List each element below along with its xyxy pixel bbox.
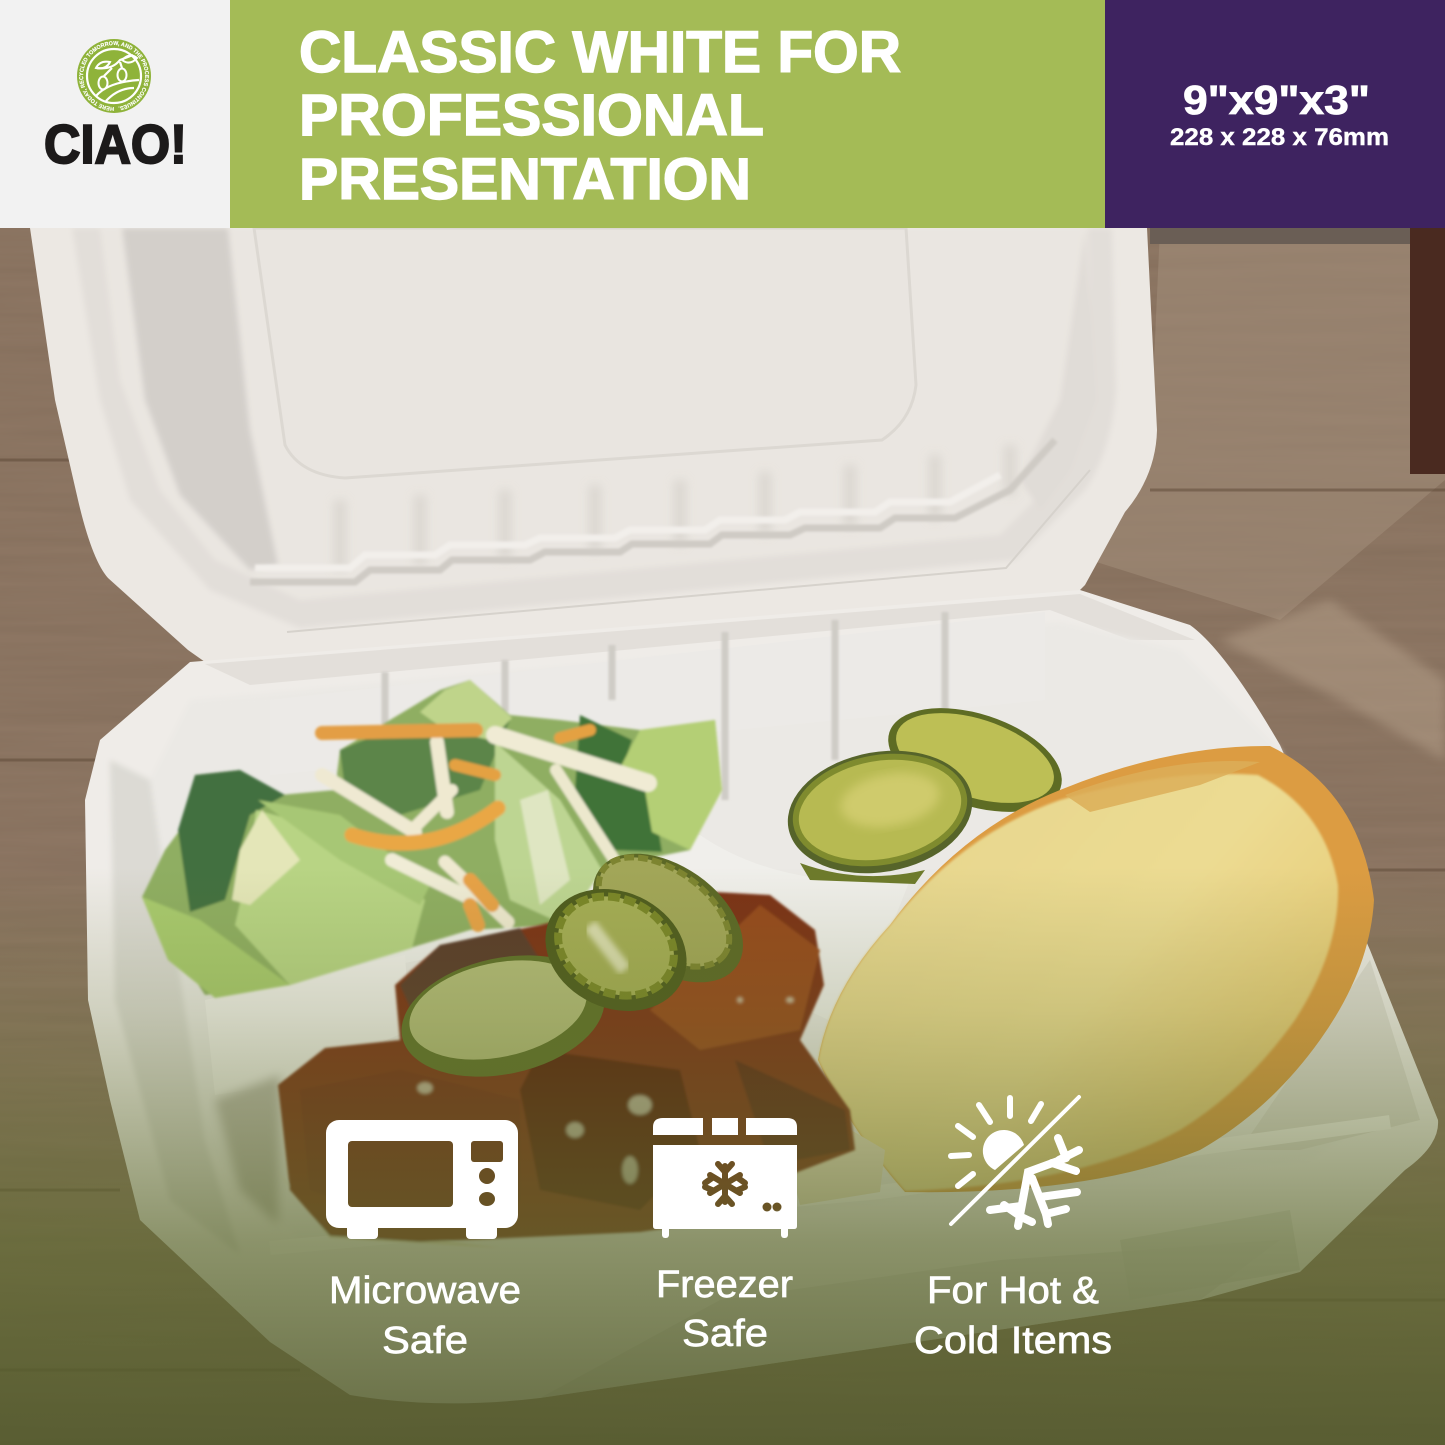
icon: freezer <box>653 1118 797 1238</box>
icon: sun and snowflake split by slash <box>951 1097 1079 1226</box>
label: For Hot & <box>927 1270 1099 1312</box>
feature: hot and cold <box>914 1097 1112 1362</box>
icon: microwave <box>326 1120 518 1239</box>
container lid <box>30 228 1157 662</box>
feature: microwave safe <box>326 1120 521 1362</box>
label <box>656 1264 793 1355</box>
title: CLASSIC WHITE FOR <box>299 20 901 85</box>
container base <box>85 590 1438 1403</box>
label <box>914 1270 1112 1362</box>
label <box>329 1270 521 1362</box>
title <box>299 20 901 212</box>
label: Safe <box>682 1313 768 1355</box>
salad <box>142 680 722 998</box>
label: Cold Items <box>914 1320 1112 1362</box>
logo badge: HERE TODAY, RECYCLED TOMORROW, AND THE PROCESS CONTINUES. <box>79 41 150 111</box>
meat with sauce <box>276 890 855 1248</box>
label: Safe <box>382 1320 468 1362</box>
label: Freezer <box>656 1264 793 1306</box>
lid rim scallops <box>250 440 1055 582</box>
header: size panel <box>1105 0 1445 228</box>
lid ribs <box>340 445 1010 570</box>
title: PROFESSIONAL <box>299 83 764 148</box>
title: PRESENTATION <box>299 147 751 212</box>
bread bun <box>790 746 1374 1205</box>
header: logo panel <box>0 0 230 228</box>
logo wordmark: CIAO! <box>44 113 187 175</box>
pickles on side compartment <box>778 688 1075 887</box>
label: Microwave <box>329 1270 521 1312</box>
dimensions in millimetres: 228 x 228 x 76mm <box>1170 124 1389 151</box>
dimensions in inches: 9"x9"x3" <box>1183 77 1370 123</box>
header: title band <box>230 0 1105 228</box>
pickles on meat <box>390 827 767 1094</box>
feature: freezer safe <box>653 1118 797 1355</box>
